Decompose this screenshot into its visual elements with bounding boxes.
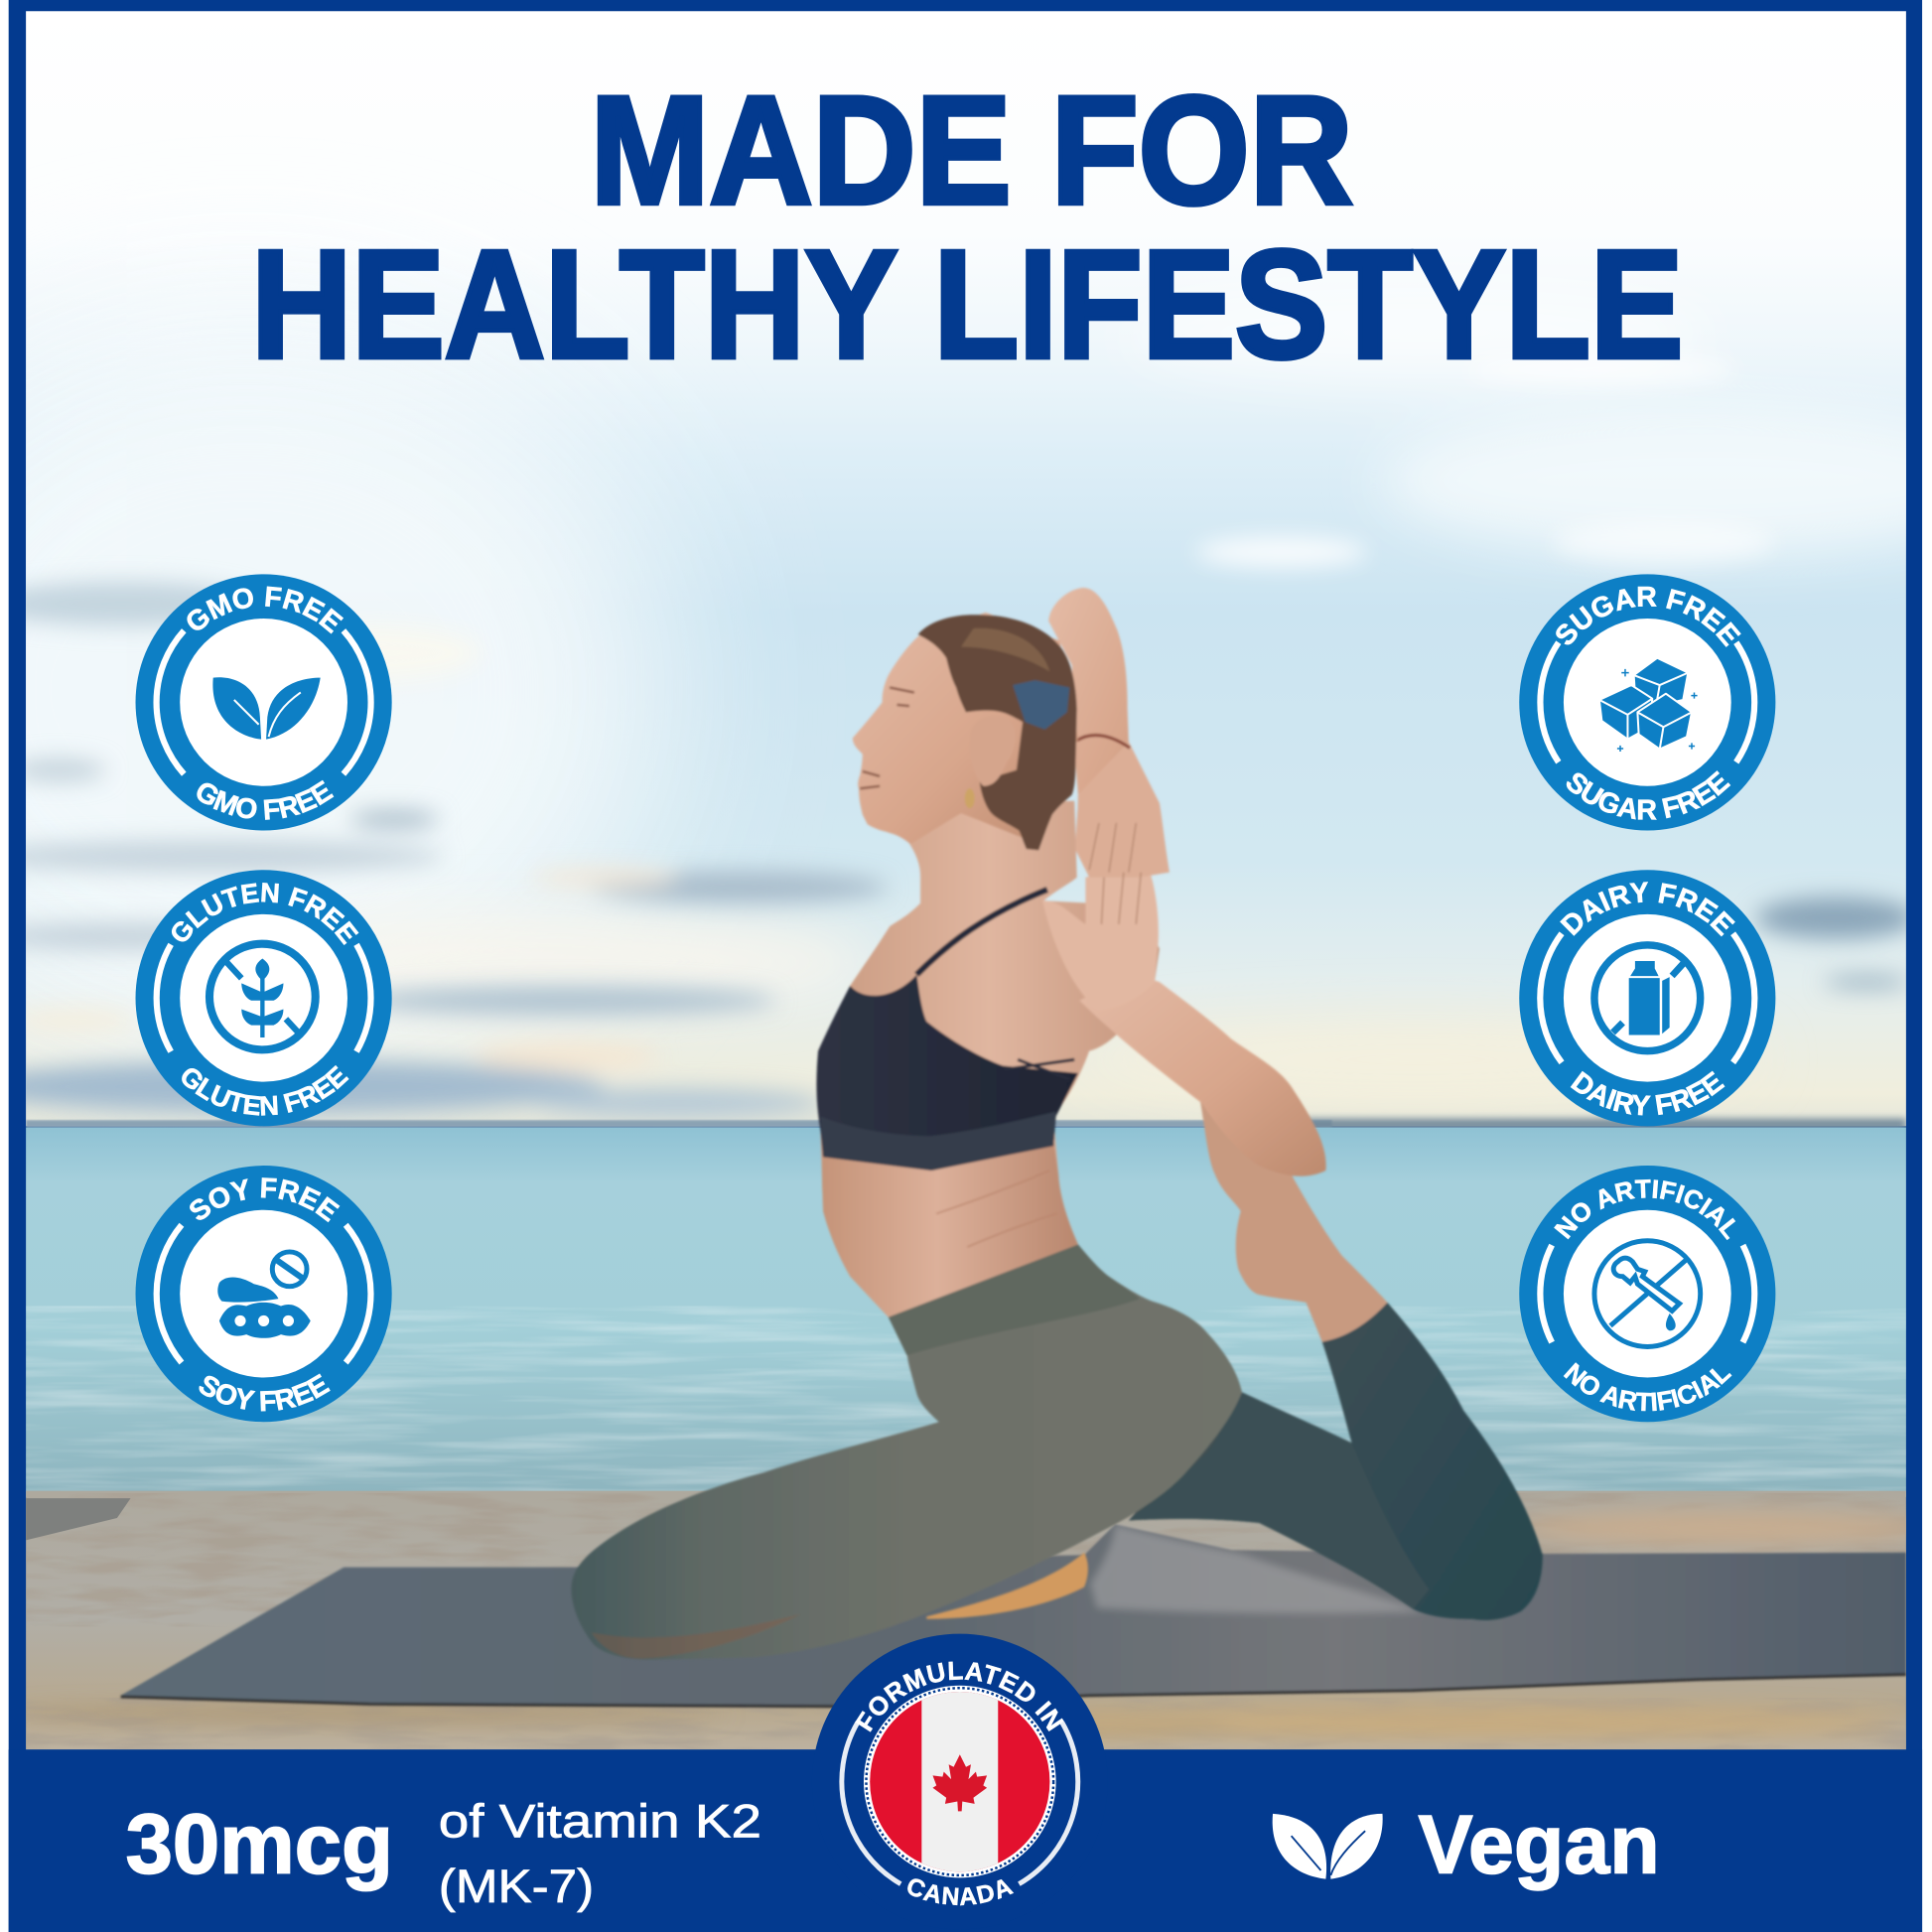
bottom band [9,1749,1922,1932]
rear leg in dark leggings [1129,1303,1543,1620]
icon: no milk carton [1594,945,1701,1051]
face and head [853,613,1078,844]
icon: soybean pods [217,1252,311,1338]
badge: formulated in Canada [812,1634,1108,1930]
badge: sugar free: SUGAR FREE [1567,770,1731,820]
badge: sugar free: SUGAR FREE [1556,586,1741,647]
forearm reaching to foot [1079,979,1326,1176]
icon: maple leaf [932,1754,987,1811]
hair [918,615,1077,850]
badge: dairy free: DAIRY FREE [1560,882,1735,937]
vegan label: Vegan [1418,1798,1660,1890]
title [251,65,1683,390]
orange heel under the body [926,1553,1088,1619]
dose text: 30mcg [126,1796,393,1891]
badge: soy free [136,1166,392,1422]
badge: dairy free [1519,870,1775,1126]
icon: vegan leaves [1273,1814,1383,1879]
icon: sugar cubes [1599,658,1698,752]
dose text: of Vitamin K2 [439,1794,761,1847]
midriff skin [822,1145,1078,1289]
badge: no artificial: NO ARTIFICIAL [1559,1357,1736,1417]
rear thigh [1129,1392,1430,1609]
badge: GMO free: GMO FREE [187,586,344,633]
badge: formulated in Canada: FORMULATED IN [850,1655,1070,1736]
icon: no dropper [1594,1241,1701,1346]
front thigh and hips in olive leggings [571,1244,1242,1660]
hair clip [1013,680,1069,730]
woman in yoga pose [571,588,1543,1660]
foot [1200,1100,1387,1342]
badge: gluten free [136,870,392,1126]
icon: leaves [212,677,321,740]
title: HEALTHY LIFESTYLE [251,218,1683,390]
upper hand fingers [1075,742,1170,878]
badge: soy free: SOY FREE [190,1177,340,1223]
badge: GMO free [136,574,392,830]
yoga mat [121,1524,1906,1707]
badge: gluten free: GLUTEN FREE [182,1064,349,1116]
title: MADE FOR [590,65,1353,236]
dose text [126,1794,761,1912]
facial features [860,688,914,788]
ear [970,716,1016,786]
skin folds [936,1181,1023,1247]
waistband [889,1244,1140,1355]
badge: no artificial [1519,1166,1775,1422]
badge: no artificial: NO ARTIFICIAL [1554,1179,1735,1241]
knee reflection [592,1614,801,1658]
earring [965,788,975,808]
badge: GMO free: GMO FREE [197,780,334,820]
bracelet [1077,736,1130,748]
badge: sugar free [1519,574,1775,830]
neck, shoulder and back [820,799,1162,1170]
dose text: (MK-7) [439,1860,594,1912]
badge: formulated in Canada: CANADA [902,1872,1018,1911]
raised arm [1048,588,1170,873]
badge: gluten free: GLUTEN FREE [171,883,359,945]
sports bra [816,975,1078,1171]
Canadian flag [863,1688,1059,1875]
lower open hand [1043,874,1160,997]
icon: no wheat [209,944,316,1049]
finger creases [1089,823,1141,924]
badge: dairy free: DAIRY FREE [1571,1070,1725,1116]
badge: soy free: SOY FREE [199,1374,331,1412]
